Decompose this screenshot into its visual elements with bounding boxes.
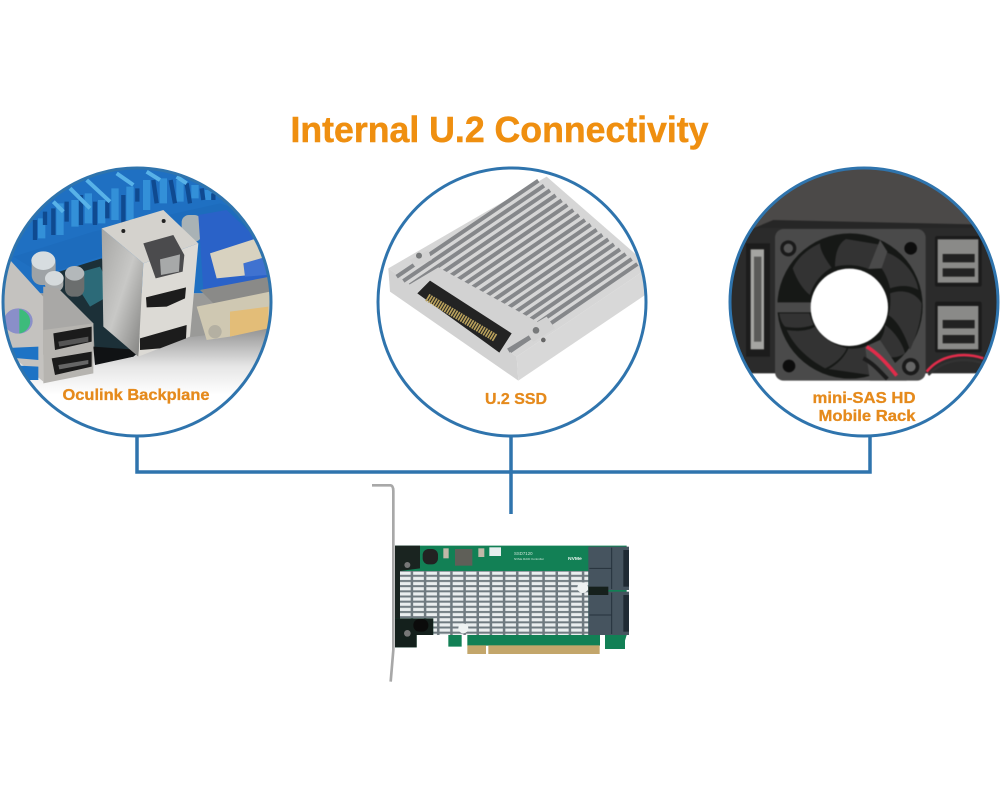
capacitors [32,260,56,285]
connector lines [137,436,870,514]
right SAS ports [935,236,982,287]
port block [102,228,143,357]
circle border [730,168,998,436]
infographic canvas [2,115,1000,682]
circle border [3,168,271,436]
fan wires [867,347,897,376]
label: mini-SAS HD Mobile Rack: mini-SAS HD [812,390,916,407]
VGA port [182,215,202,242]
NVMe RAID controller card [372,485,629,682]
label: U.2 SSD: U.2 SSD [485,391,547,408]
left drive connector [746,243,770,357]
heat sink [400,571,588,635]
SFF connectors [588,547,629,590]
panel: mini-SAS HD Mobile Rack [720,160,1000,440]
panel: Oculink Backplane [0,160,280,440]
rear panel [4,261,44,382]
circuit board [395,546,627,649]
gold edge fingers [467,645,486,654]
title: Internal U.2 Connectivity [290,109,708,150]
heatsink fin fronts [42,178,208,238]
circle border [378,168,646,436]
board text: SSD7120 [514,551,533,556]
panel: U.2 SSD [370,160,657,440]
label: Oculink Backplane: Oculink Backplane [62,387,210,404]
label: mini-SAS HD Mobile Rack: Mobile Rack [818,408,916,425]
heatsink highlights [53,172,187,212]
NVMe RAID controller card: NVMe [568,556,582,562]
DVI port [197,292,270,340]
photo: U.2 SSD drive [388,176,644,380]
mounting bracket [372,485,393,682]
board components [423,549,438,564]
fan [775,229,926,381]
photo: motherboard rear I/O [4,170,270,385]
label: mini-SAS HD Mobile Rack [812,390,916,425]
heatsink slots [35,180,213,240]
NVMe RAID controller card: NVMe RAID Controller [514,557,544,561]
photo: mobile rack with fan [732,170,996,382]
